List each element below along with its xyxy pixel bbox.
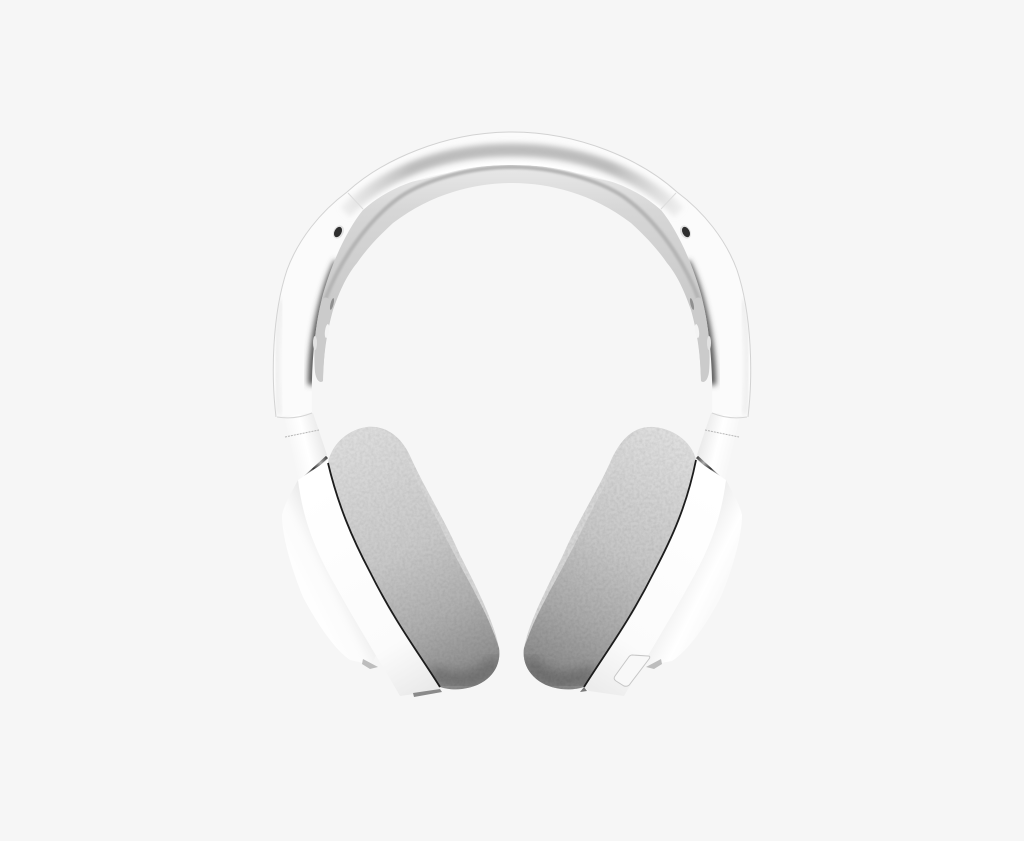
right cushion rear layer and face (524, 427, 697, 692)
adjuster plate left (313, 298, 335, 382)
band top shading (345, 150, 679, 212)
mic hole left (331, 223, 346, 241)
right control button (614, 655, 650, 686)
right earcup (515, 413, 747, 700)
left cup back shell (282, 480, 398, 665)
inner steel headband arc (312, 160, 712, 376)
left cup front ring (298, 460, 441, 696)
right cup back shell (626, 480, 742, 665)
left earcup (277, 413, 510, 700)
right cup front ring (585, 460, 726, 696)
illustration: white over-ear headset on light grey background (272, 132, 752, 697)
right cup stem (646, 659, 662, 669)
right cushion foot (580, 687, 587, 692)
band side shading (277, 262, 747, 415)
mic hole right (678, 223, 693, 241)
right yoke (697, 413, 747, 480)
adjuster plate right (689, 298, 711, 382)
left cup stem (362, 659, 378, 669)
left cushion rear layer and face (327, 426, 500, 690)
headband outer shell (273, 132, 751, 417)
left yoke (277, 413, 327, 480)
left port (413, 689, 442, 697)
